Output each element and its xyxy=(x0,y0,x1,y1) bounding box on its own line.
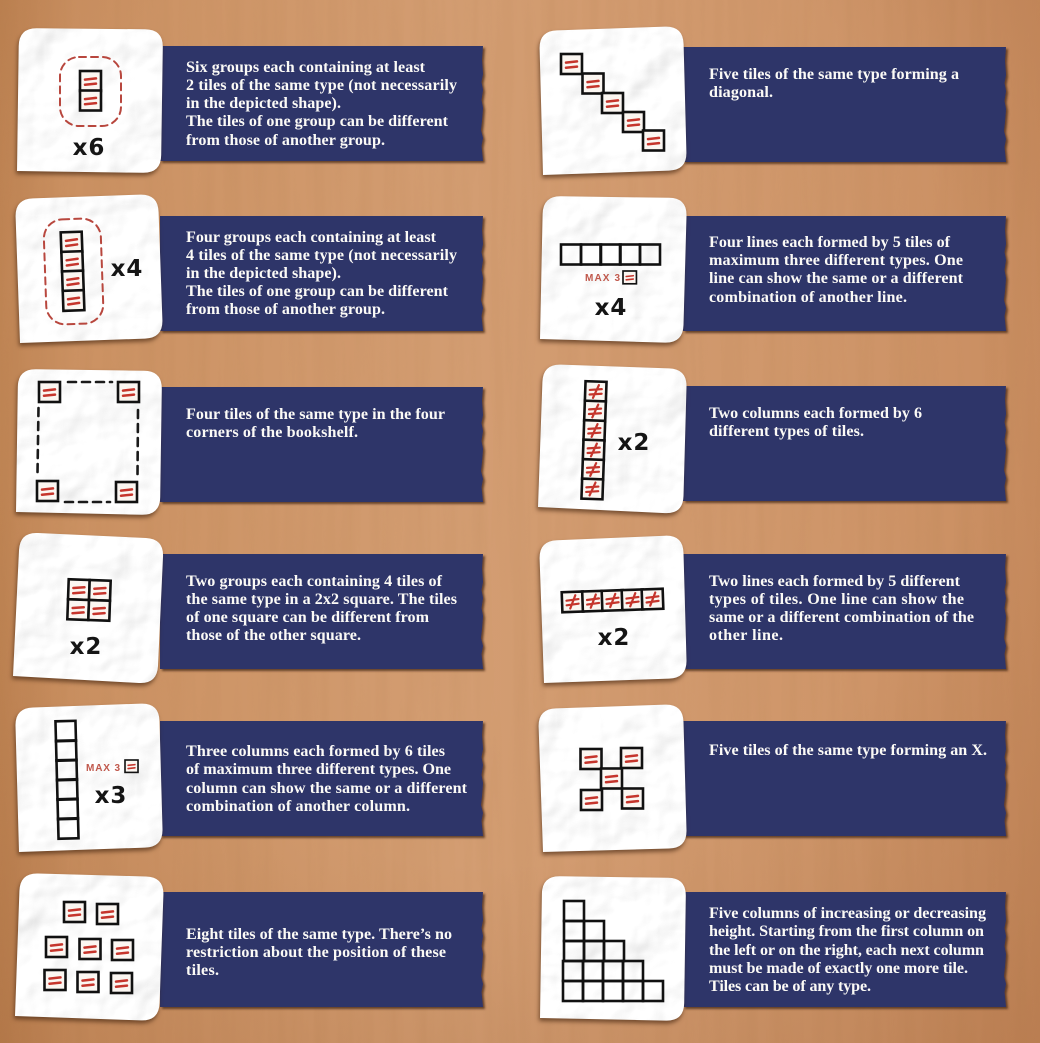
banner text xyxy=(683,554,1006,669)
banner text: combination of another line. xyxy=(709,289,907,306)
banner text: line can show the same or a different xyxy=(709,270,964,287)
banner text: combination of another column. xyxy=(186,798,410,815)
banner text: Five tiles of the same type forming a xyxy=(709,66,959,83)
banner text: corners of the bookshelf. xyxy=(186,424,358,441)
banner text xyxy=(160,216,483,331)
banner text: Two groups each containing 4 tiles of xyxy=(186,573,443,590)
banner text: Four groups each containing at least xyxy=(186,229,437,246)
banner text xyxy=(683,386,1006,501)
banner text xyxy=(160,554,483,669)
banner text: tiles. xyxy=(186,962,219,979)
goal card: x2 xyxy=(618,430,650,456)
goal card: x4 xyxy=(595,295,627,321)
banner text: Two lines each formed by 5 different xyxy=(709,573,961,590)
banner text: 4 tiles of the same type (not necessarily xyxy=(186,247,457,264)
banner text xyxy=(683,721,1006,836)
banner text: must be made of exactly one more tile. xyxy=(709,960,968,977)
banner text: maximum three different types. One xyxy=(709,252,963,269)
goal card xyxy=(16,195,162,343)
banner text xyxy=(683,47,1006,162)
banner text: Five columns of increasing or decreasing xyxy=(709,905,986,922)
goal card xyxy=(13,533,163,683)
banner text: column can show the same or a different xyxy=(186,780,468,797)
banner text: other line. xyxy=(709,627,783,644)
banner text: same or a different combination of the xyxy=(709,609,974,626)
goal card xyxy=(540,196,687,343)
goal card: x6 xyxy=(73,135,105,161)
banner text: The tiles of one group can be different xyxy=(186,283,449,300)
goal card xyxy=(16,369,162,515)
banner text: the same type in a 2x2 square. The tiles xyxy=(186,591,457,608)
panel: four corners xyxy=(16,369,483,515)
panel: two lines of five different types xyxy=(540,536,1006,683)
banner text: from those of another group. xyxy=(186,301,385,318)
banner text: Three columns each formed by 6 tiles xyxy=(186,743,445,760)
banner text: in the depicted shape). xyxy=(186,95,341,112)
panel: three columns of max three types xyxy=(15,704,483,852)
banner text xyxy=(160,721,483,836)
panel: two 2x2 squares xyxy=(13,533,483,683)
banner text: of maximum three different types. One xyxy=(186,761,451,778)
banner text: Four lines each formed by 5 tiles of xyxy=(709,234,951,251)
banner text: from those of another group. xyxy=(186,132,385,149)
banner text xyxy=(683,892,1006,1007)
goal card: MAX 3 xyxy=(585,273,620,284)
goal card xyxy=(17,28,163,173)
panel: four lines of max three types xyxy=(540,196,1006,343)
banner text: different types of tiles. xyxy=(709,423,864,440)
banner text: Five tiles of the same type forming an X. xyxy=(709,742,987,759)
goal card: MAX 3 xyxy=(86,763,120,774)
panel: four groups of four tiles xyxy=(16,195,483,343)
banner text: of one square can be different from xyxy=(186,609,430,626)
banner text: Six groups each containing at least xyxy=(186,59,426,76)
banner text: Two columns each formed by 6 xyxy=(709,405,922,422)
goal card xyxy=(538,365,687,513)
panel: X shape xyxy=(539,705,1006,852)
panel: two columns of six different types xyxy=(538,365,1006,513)
goal card: x3 xyxy=(95,783,127,809)
goal card: x2 xyxy=(598,625,630,651)
banner text: Four tiles of the same type in the four xyxy=(186,406,445,423)
banner text: those of the other square. xyxy=(186,627,361,644)
banner text xyxy=(683,216,1006,331)
banner text: height. Starting from the first column on xyxy=(709,923,984,940)
panel: staircase columns xyxy=(540,876,1006,1021)
goal card xyxy=(540,876,686,1021)
banner text: in the depicted shape). xyxy=(186,265,341,282)
banner text: The tiles of one group can be different xyxy=(186,113,449,130)
goal card xyxy=(15,873,163,1020)
goal card xyxy=(540,27,686,175)
banner text: diagonal. xyxy=(709,84,773,101)
banner text xyxy=(160,892,483,1007)
panel: diagonal xyxy=(540,27,1006,175)
banner text: the left or on the right, each next column xyxy=(709,942,984,959)
panel: six groups of two tiles xyxy=(17,28,483,173)
goal card xyxy=(540,536,687,683)
banner text xyxy=(160,46,483,161)
banner text: types of tiles. One line can show the xyxy=(709,591,964,608)
banner text: Eight tiles of the same type. There’s no xyxy=(186,926,452,943)
goal card xyxy=(15,704,163,852)
goal card xyxy=(539,705,687,852)
banner text: restriction about the position of these xyxy=(186,944,446,961)
goal card: x4 xyxy=(111,256,143,282)
banner text xyxy=(160,387,483,502)
goal card: x2 xyxy=(70,634,102,660)
banner text: 2 tiles of the same type (not necessarily xyxy=(186,77,457,94)
banner text: Tiles can be of any type. xyxy=(709,978,871,995)
panel: eight tiles xyxy=(15,873,483,1020)
